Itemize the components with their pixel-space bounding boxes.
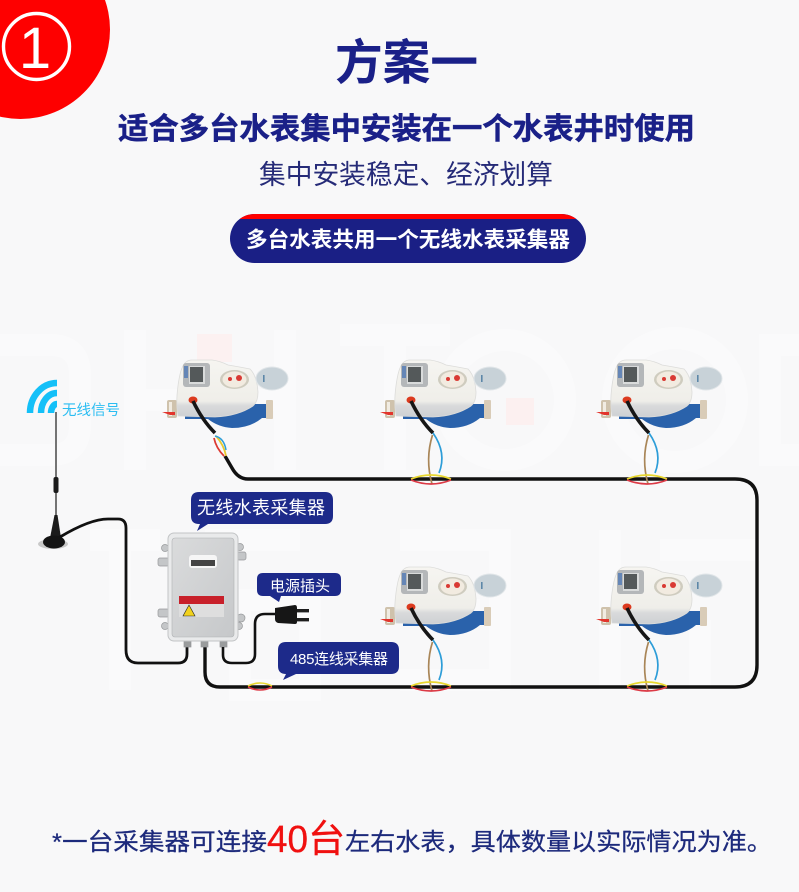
antenna [38,412,68,549]
water meter 4 [380,567,506,691]
watermark [0,330,799,690]
badge: number one: 1 [19,16,51,81]
footnote: 40台 [267,819,345,861]
water meter 2 [380,360,506,484]
callout: 485 line: 485连线采集器 [290,651,388,668]
power plug [275,605,309,624]
footnote: *一台采集器可连接 [52,829,267,856]
callout: power plug: 电源插头 [270,578,330,595]
badge: number one [0,0,110,119]
water meter 3 [596,360,722,484]
wireless icon [30,383,57,413]
water meter 1 [162,360,288,456]
main 485 cable [205,456,757,687]
footnote [52,819,772,861]
power cable [223,614,276,663]
water meter 5 [596,567,722,691]
subtitle: 适合多台水表集中安装在一个水表井时使用 [118,112,695,146]
description: 集中安装稳定、经济划算 [259,160,553,190]
banner [230,214,586,263]
collector box [158,533,246,647]
banner: 多台水表共用一个无线水表采集器 [246,227,570,252]
callout: power plug [257,573,341,602]
wireless signal label: 无线信号 [62,402,120,419]
title: 方案一 [335,37,478,90]
antenna cable [60,519,187,663]
footnote: 左右水表，具体数量以实际情况为准。 [345,829,772,856]
splice on collector line [248,683,272,690]
callout: 485 line [278,642,399,680]
callout: wireless collector: 无线水表采集器 [197,498,325,518]
callout: wireless collector [191,492,333,531]
